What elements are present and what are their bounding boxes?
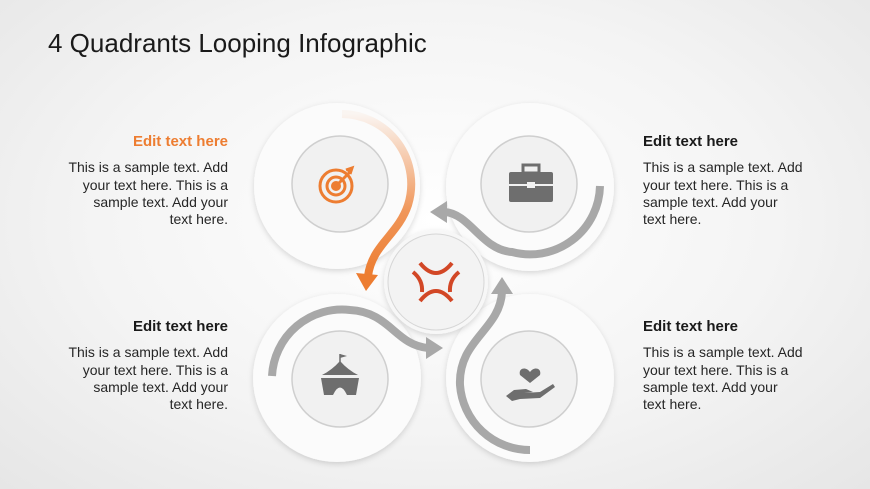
icon: target (320, 168, 352, 202)
text block: bottom-left: text here. (170, 396, 228, 412)
text block: bottom-right: sample text. Add your (643, 379, 778, 395)
text block: bottom-left: Edit text here (133, 318, 228, 335)
text block: bottom-left: This is a sample text. Add (68, 344, 228, 360)
text block: top-left: sample text. Add your (93, 194, 228, 210)
text block: top-left: your text here. This is a (83, 177, 228, 193)
text block: top-left: Edit text here (133, 133, 228, 150)
center circle (384, 230, 488, 334)
text block: top-left (68, 133, 228, 227)
text block: top-left: text here. (170, 211, 228, 227)
text block: bottom-right: text here. (643, 396, 701, 412)
text block: top-right: This is a sample text. Add (643, 159, 803, 175)
text block: bottom-right: This is a sample text. Add (643, 344, 803, 360)
text block: bottom-left: sample text. Add your (93, 379, 228, 395)
text block: top-right: Edit text here (643, 133, 738, 150)
text block: bottom-right (643, 318, 803, 412)
arrow: top-right loop (430, 186, 600, 254)
text block: bottom-left (68, 318, 228, 412)
ring: top-left (254, 103, 420, 269)
icon: circus tent (321, 354, 359, 395)
icon: briefcase (509, 165, 553, 202)
text block: top-right (643, 133, 803, 227)
title: 4 Quadrants Looping Infographic (48, 28, 427, 58)
text block: top-right: sample text. Add your (643, 194, 778, 210)
arrow: bottom-left loop (272, 310, 443, 376)
text block: top-left: This is a sample text. Add (68, 159, 228, 175)
arrow: top-left orange loop (342, 114, 411, 291)
icon: heart in hand (506, 368, 555, 401)
ring: bottom-left (253, 294, 421, 462)
text block: top-right: your text here. This is a (643, 177, 788, 193)
text block: bottom-right: your text here. This is a (643, 362, 788, 378)
text block: bottom-right: Edit text here (643, 318, 738, 335)
arrow: bottom-right loop (460, 277, 530, 450)
text block: top-right: text here. (643, 211, 701, 227)
text block: bottom-left: your text here. This is a (83, 362, 228, 378)
ring: bottom-right (446, 294, 614, 462)
icon: center angry symbol (413, 263, 459, 301)
ring: top-right (446, 103, 614, 271)
